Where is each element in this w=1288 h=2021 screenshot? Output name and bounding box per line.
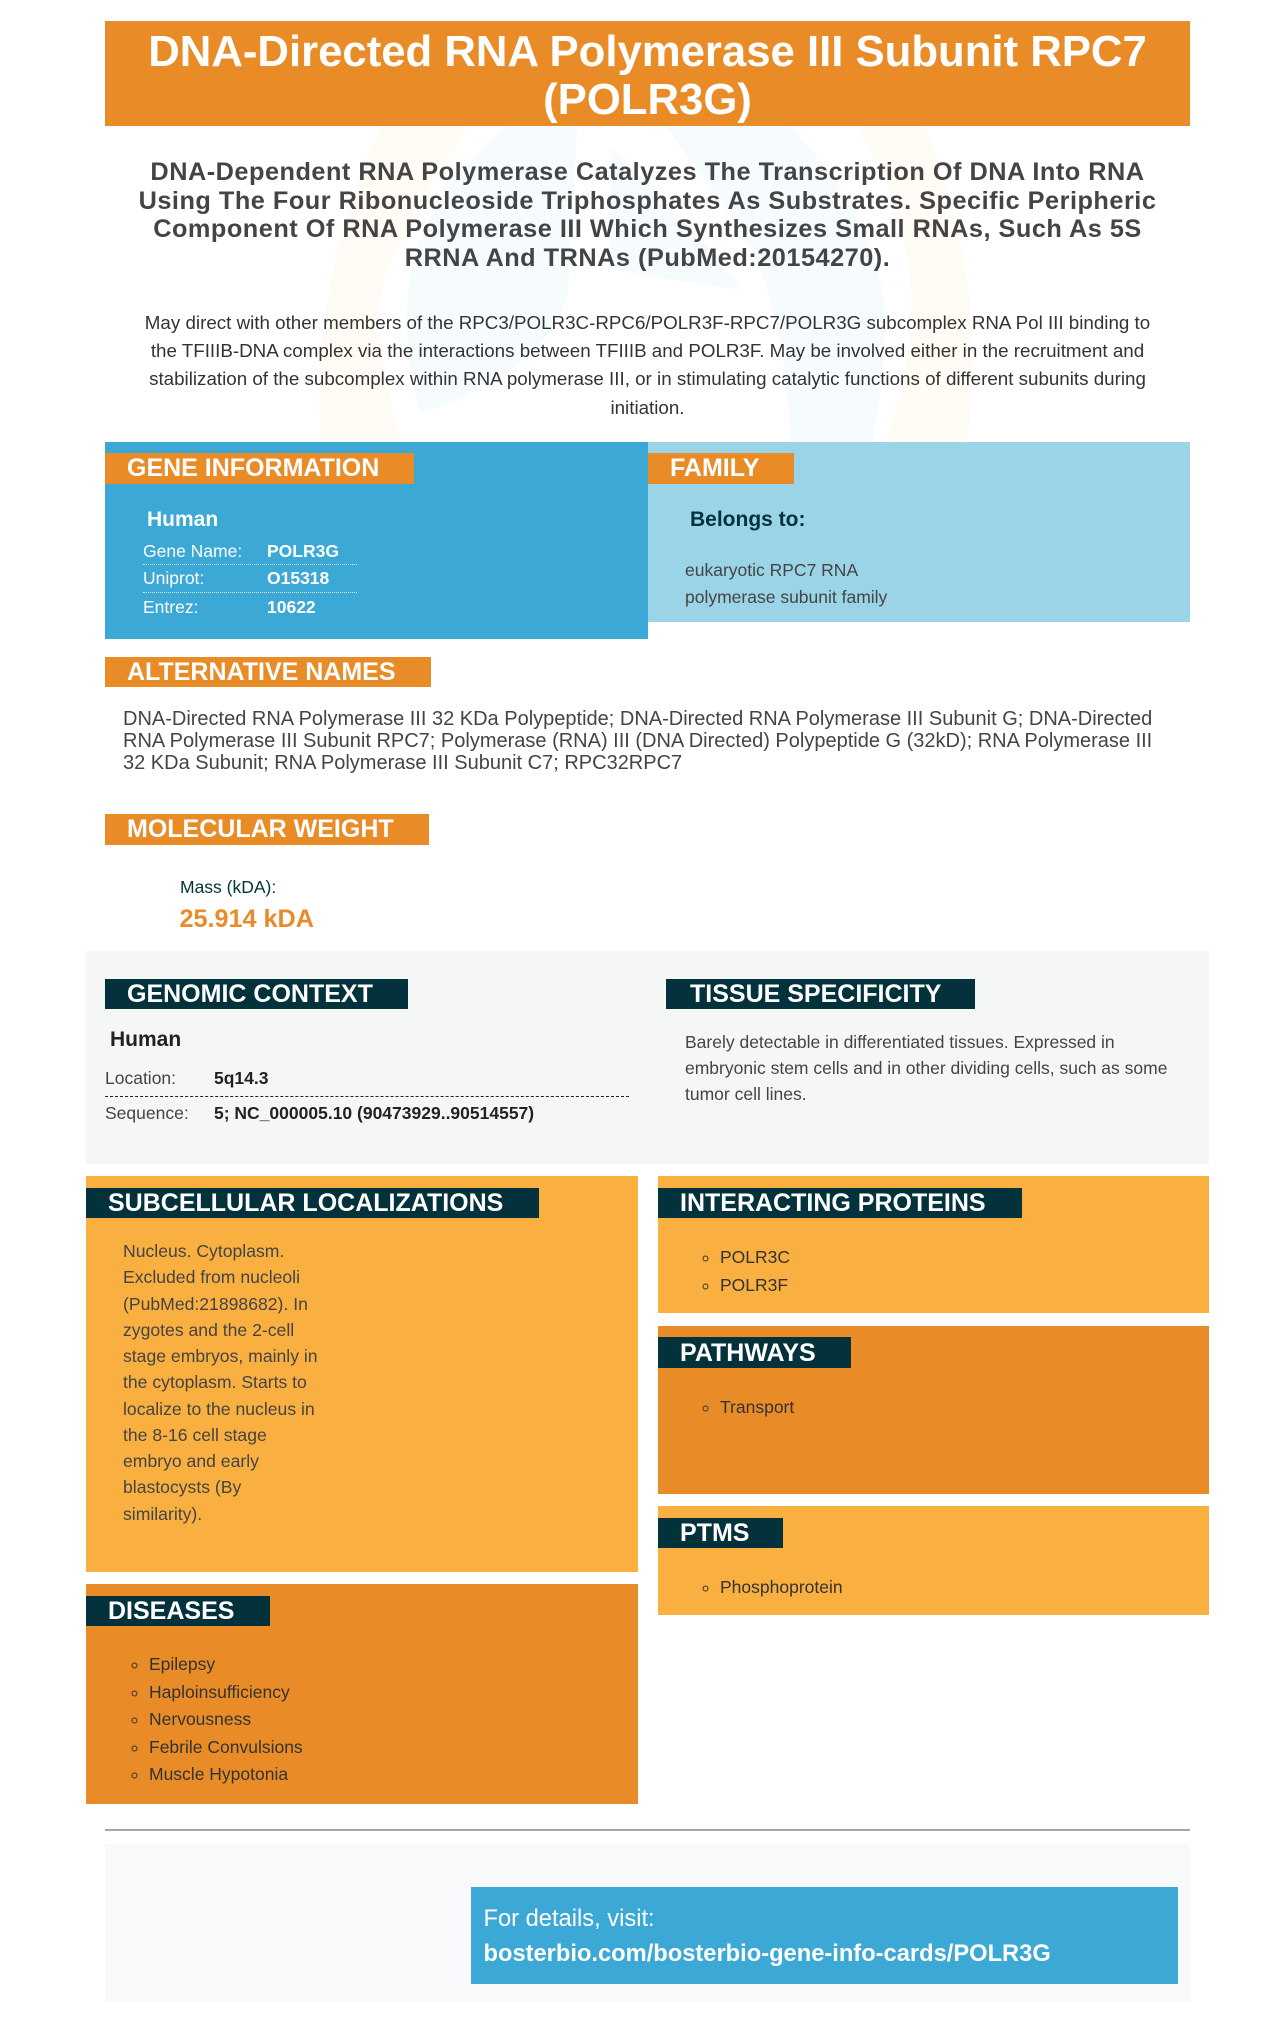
tissue specificity text	[685, 1032, 1167, 1104]
location row: Location:	[105, 1068, 176, 1088]
description paragraph: stabilization of the subcomplex within RNA polymerase III, or in stimulating catalytic functions of different subunits during	[149, 368, 1146, 389]
heading: molecular weight: MOLECULAR WEIGHT	[127, 815, 394, 843]
tissue specificity text: Barely detectable in differentiated tissues. Expressed in	[685, 1032, 1115, 1052]
protein list	[702, 1247, 790, 1295]
protein list: POLR3F	[720, 1275, 788, 1295]
location row: 5q14.3	[214, 1068, 268, 1088]
description paragraph: the TFIIIB-DNA complex via the interactions between TFIIIB and POLR3F. May be involved either in the recruitment and	[151, 340, 1144, 361]
disease list: Nervousness	[149, 1709, 251, 1729]
localization text: stage embryos, mainly in	[123, 1346, 318, 1366]
description paragraph: initiation.	[610, 397, 685, 418]
sequence row: 5; NC_000005.10 (90473929..90514557)	[214, 1103, 534, 1123]
entrez row: Entrez:	[143, 597, 198, 617]
localization text: Nucleus. Cytoplasm.	[123, 1241, 284, 1261]
heading: subcellular localizations: SUBCELLULAR LOCALIZATIONS	[108, 1189, 503, 1217]
panel: interacting proteins	[658, 1176, 1209, 1313]
title banner	[105, 21, 1190, 126]
background watermark: DNA logo	[320, 126, 972, 442]
panel: genomic context and tissue specificity	[86, 951, 1209, 1164]
belongs to label: Belongs to:	[690, 508, 806, 531]
disease list: Febrile Convulsions	[149, 1736, 303, 1756]
gene name row	[143, 541, 339, 561]
ptm list: Phosphoprotein	[720, 1577, 843, 1597]
localization text: localize to the nucleus in	[123, 1398, 315, 1418]
heading: interacting proteins: INTERACTING PROTEINS	[680, 1189, 986, 1217]
gene name row: POLR3G	[267, 541, 339, 561]
panel: gene information	[105, 442, 648, 639]
title: DNA-Directed RNA Polymerase III Subunit RPC7	[148, 27, 1147, 76]
entrez row: 10622	[267, 597, 316, 617]
family text	[685, 560, 888, 606]
panel: family	[648, 442, 1190, 622]
panel: ptms	[658, 1506, 1209, 1615]
heading: diseases	[86, 1596, 270, 1626]
heading: gene information: GENE INFORMATION	[127, 454, 379, 482]
localization text: Excluded from nucleoli	[123, 1267, 300, 1287]
subtitle: function summary	[139, 158, 1156, 272]
alternative names text: DNA-Directed RNA Polymerase III 32 KDa Polypeptide; DNA-Directed RNA Polymerase III Subunit G; DNA-Directed	[123, 708, 1152, 730]
uniprot row	[143, 568, 329, 588]
localization text: embryo and early	[123, 1451, 259, 1471]
pathway list: Transport	[720, 1397, 794, 1417]
localization text: the cytoplasm. Starts to	[123, 1372, 307, 1392]
panel: footer	[105, 1844, 1190, 2002]
callout: details link	[471, 1887, 1178, 1984]
disease list	[132, 1654, 303, 1784]
panel: subcellular localizations	[86, 1176, 638, 1572]
title: (POLR3G)	[543, 75, 752, 124]
visit label: For details, visit:	[484, 1906, 655, 1932]
heading: family	[648, 453, 794, 484]
tissue specificity text: tumor cell lines.	[685, 1084, 807, 1104]
heading: diseases: DISEASES	[108, 1597, 234, 1625]
uniprot row: Uniprot:	[143, 568, 204, 588]
heading: pathways: PATHWAYS	[680, 1339, 816, 1367]
description paragraph	[145, 312, 1150, 418]
url: bosterbio.com/bosterbio-gene-info-cards/POLR3G	[484, 1941, 1051, 1967]
protein list: POLR3C	[720, 1247, 790, 1267]
heading: alternative names: ALTERNATIVE NAMES	[127, 658, 396, 686]
species label: Human	[147, 508, 218, 531]
panel: pathways	[658, 1326, 1209, 1494]
heading: ptms	[658, 1518, 783, 1548]
heading: ptms: PTMS	[680, 1519, 749, 1547]
alternative names text	[123, 708, 1152, 774]
species label: Human	[110, 1028, 181, 1051]
subtitle: function summary: DNA-Dependent RNA Polymerase Catalyzes The Transcription Of DNA Into RNA	[150, 158, 1145, 186]
mass label: Mass (kDA):	[180, 877, 276, 897]
heading: tissue specificity: TISSUE SPECIFICITY	[690, 980, 941, 1008]
localization text: blastocysts (By	[123, 1477, 241, 1497]
subtitle: function summary: RRNA And TRNAs (PubMed:20154270).	[405, 244, 890, 272]
heading: family: FAMILY	[670, 454, 759, 482]
gene name row: Gene Name:	[143, 541, 242, 561]
tissue specificity text: embryonic stem cells and in other dividing cells, such as some	[685, 1058, 1167, 1078]
localization text: the 8-16 cell stage	[123, 1425, 267, 1445]
mass value: 25.914 kDA	[180, 905, 314, 933]
disease list: Muscle Hypotonia	[149, 1764, 288, 1784]
description paragraph: May direct with other members of the RPC3/POLR3C-RPC6/POLR3F-RPC7/POLR3G subcomplex RNA Pol III binding to	[145, 312, 1150, 332]
subtitle: function summary: Using The Four Ribonucleoside Triphosphates As Substrates. Specific Peripheric	[139, 187, 1156, 215]
localization text: zygotes and the 2-cell	[123, 1320, 294, 1340]
localization text: (PubMed:21898682). In	[123, 1294, 308, 1314]
localization text: similarity).	[123, 1504, 202, 1524]
heading: pathways	[658, 1337, 851, 1368]
uniprot row: O15318	[267, 568, 329, 588]
alternative names text: RNA Polymerase III Subunit RPC7; Polymerase (RNA) III (DNA Directed) Polypeptide G (32kD); RNA Polymerase III	[123, 730, 1152, 752]
family text: eukaryotic RPC7 RNA	[685, 560, 858, 580]
location row	[105, 1068, 268, 1088]
alternative names text: 32 KDa Subunit; RNA Polymerase III Subunit C7; RPC32RPC7	[123, 752, 682, 774]
disease list: Haploinsufficiency	[149, 1682, 290, 1702]
disease list: Epilepsy	[149, 1654, 215, 1674]
title	[148, 27, 1147, 124]
localization text	[123, 1241, 318, 1524]
family text: polymerase subunit family	[685, 586, 887, 606]
panel: diseases	[86, 1584, 638, 1804]
heading: genomic context: GENOMIC CONTEXT	[127, 980, 373, 1008]
sequence row: Sequence:	[105, 1103, 189, 1123]
subtitle: function summary: Component Of RNA Polymerase III Which Synthesizes Small RNAs, Such As 5S	[153, 215, 1142, 243]
entrez row	[143, 597, 316, 617]
